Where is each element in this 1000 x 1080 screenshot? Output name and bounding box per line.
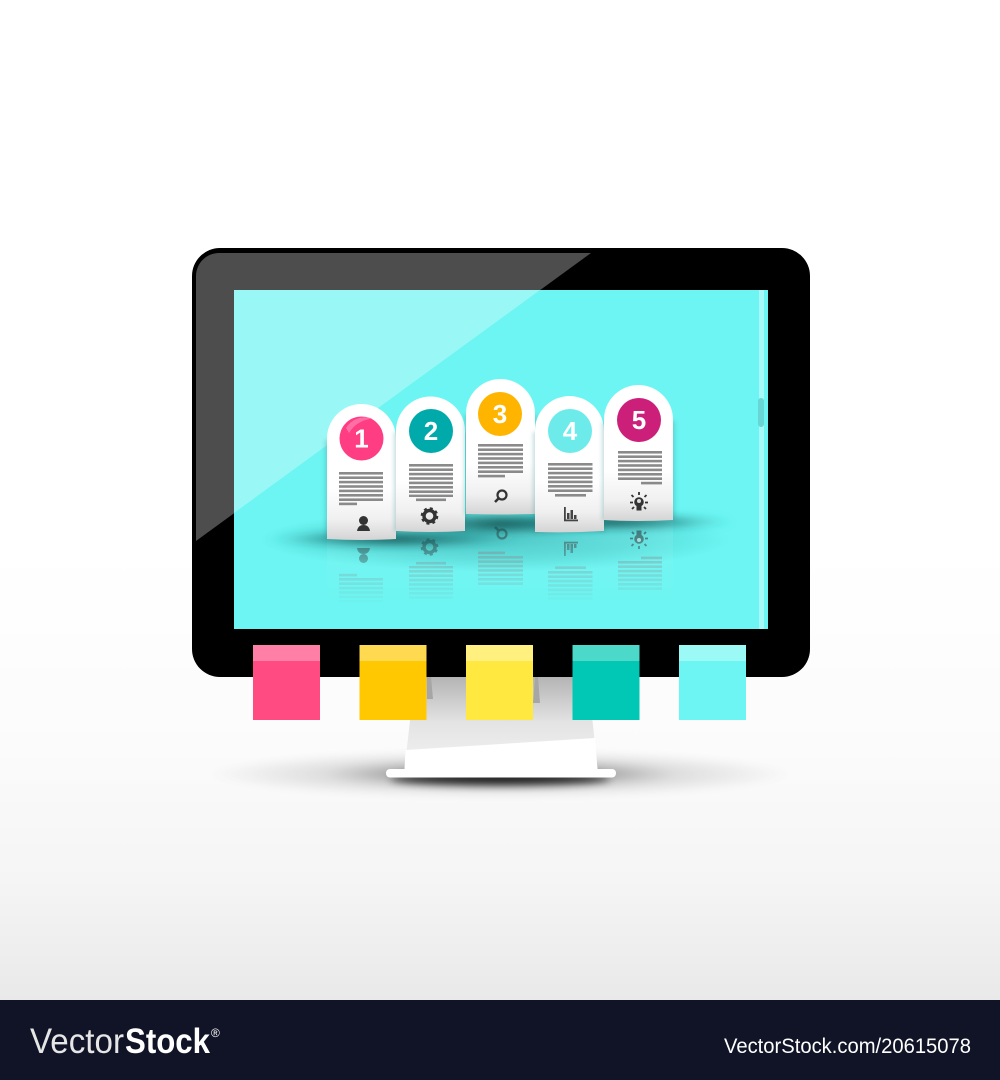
- card side shadow: [602, 421, 675, 520]
- card shadow on screen: [267, 511, 735, 549]
- step card 5: [602, 385, 675, 521]
- step card 2: [394, 396, 467, 532]
- number badge: 4: [563, 416, 578, 446]
- card body: [535, 396, 604, 532]
- card side shadow: [464, 415, 537, 514]
- card reflections: [327, 515, 673, 605]
- registered mark: ®: [211, 1026, 220, 1040]
- card body: [466, 379, 535, 514]
- number badge: 5: [632, 405, 646, 435]
- monitor stand: [386, 677, 616, 778]
- step card 1: [325, 404, 398, 540]
- reflected icons and lines: [339, 526, 662, 596]
- step card 3: [464, 379, 537, 514]
- card side shadow: [533, 432, 606, 532]
- screen floor tint: [260, 508, 730, 572]
- number badge: 2: [424, 416, 438, 446]
- card body: [396, 396, 465, 532]
- footer logo vector: Vector: [30, 1022, 124, 1061]
- aqua tab: [679, 645, 746, 720]
- scrollbar: [758, 290, 764, 629]
- screen: [234, 290, 768, 629]
- frame gloss: [196, 253, 591, 541]
- neck highlight: [404, 738, 598, 770]
- card side shadow: [394, 432, 467, 531]
- reflections under the cards: [327, 515, 673, 596]
- text lines and light bulb icon: [618, 451, 662, 510]
- teal tab: [572, 645, 640, 720]
- monitor frame: [192, 248, 810, 677]
- text lines and person icon: [339, 472, 383, 531]
- screen gloss: [234, 290, 540, 513]
- card side shadow: [325, 440, 398, 539]
- stand base: [386, 769, 616, 778]
- neck side shadows: [427, 677, 540, 703]
- number badge: 3: [493, 399, 507, 429]
- footer logo stock: Stock: [125, 1022, 210, 1061]
- stand neck: [404, 677, 598, 769]
- step card 4: [533, 396, 606, 532]
- floor shadow: [205, 750, 795, 798]
- yellow tab: [466, 645, 533, 720]
- footer image id: VectorStock.com/20615078: [724, 1035, 971, 1058]
- orange tab: [360, 645, 426, 720]
- card body: [327, 404, 396, 540]
- footer bar: [0, 1000, 1000, 1080]
- text lines and gear icon: [409, 464, 453, 524]
- pink tab: [253, 645, 320, 720]
- number badge: 1: [354, 424, 369, 454]
- colour tabs: [253, 645, 746, 720]
- monitor: [192, 248, 810, 677]
- text lines and magnifier icon: [478, 444, 523, 502]
- card body: [604, 385, 673, 521]
- text lines and chart icon: [548, 463, 592, 521]
